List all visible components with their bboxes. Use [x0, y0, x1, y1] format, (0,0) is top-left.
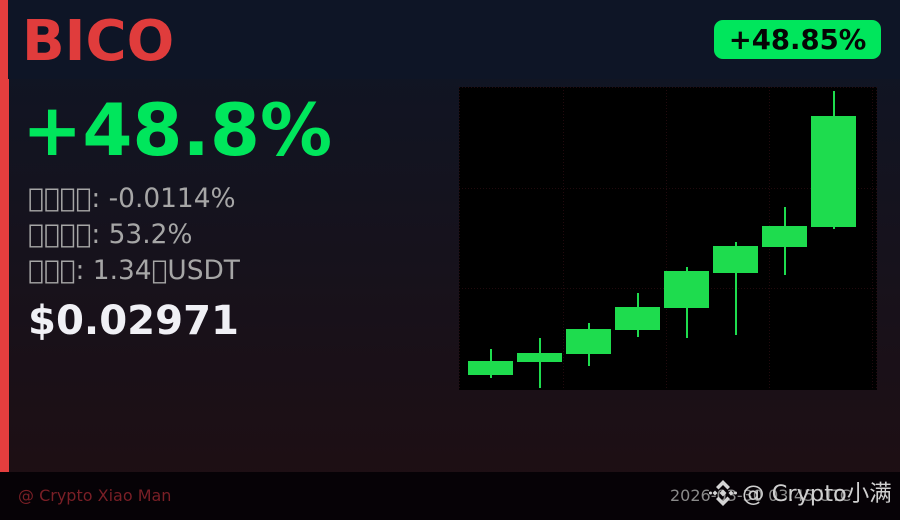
title: BICO: BICO: [22, 9, 174, 74]
price: $0.02971: [28, 298, 239, 344]
footer author: @ Crypto Xiao Man: [18, 486, 171, 505]
header band: [8, 0, 900, 79]
change badge: [714, 20, 881, 59]
icon: binance logo: [709, 480, 737, 506]
stat: volume: : 1.34USDT: [28, 255, 240, 286]
left red accent bar: [0, 0, 9, 472]
candles: [468, 91, 856, 388]
watermark: @ Crypto小满: [742, 481, 892, 507]
stat: funding rate: : -0.0114%: [28, 183, 236, 214]
change badge: +48.85%: [729, 24, 866, 56]
footer date: 2026-03-30 03:45 UTC: [670, 486, 851, 505]
stat: long short ratio: : 53.2%: [28, 219, 192, 250]
candlestick chart: [459, 87, 877, 390]
big percentage: +48.8%: [22, 88, 332, 172]
footer band: [0, 472, 900, 520]
